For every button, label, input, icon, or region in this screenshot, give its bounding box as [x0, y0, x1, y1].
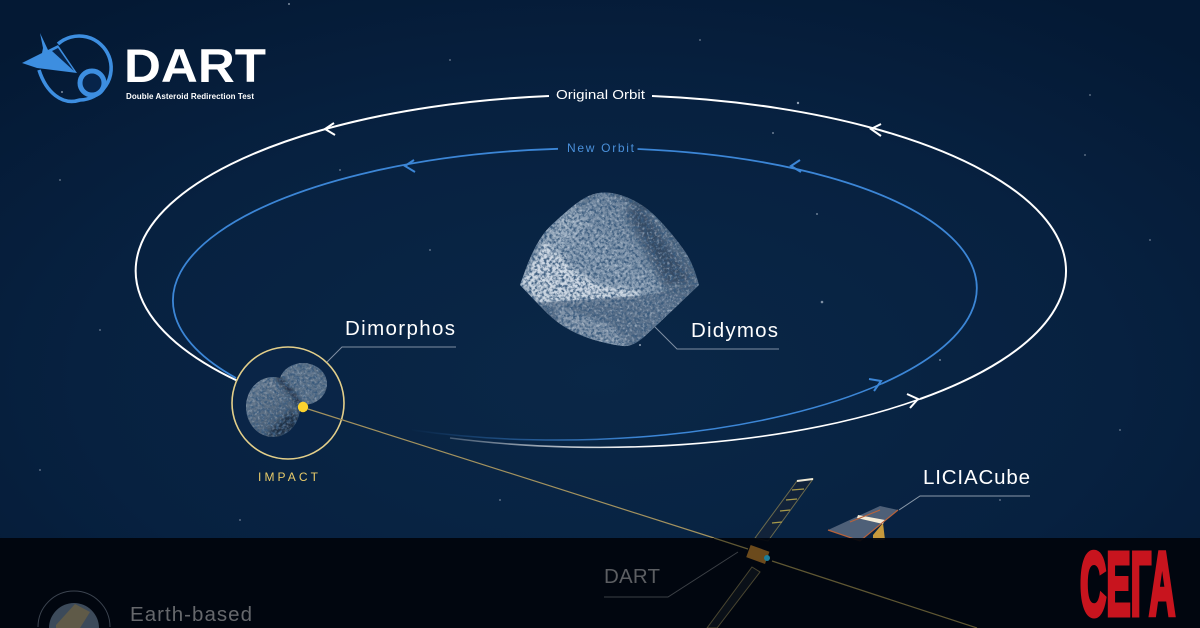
Earth-based observatory icon	[38, 591, 110, 628]
asteroid: Dimorphos	[246, 363, 327, 437]
arrow: new orbit bottom right	[869, 379, 881, 391]
DART logo	[22, 33, 266, 101]
label: Earth-based: Earth-based	[130, 603, 252, 626]
label: Dimorphos with leader: Dimorphos	[345, 317, 455, 340]
impact point	[298, 402, 308, 412]
original orbit (white)	[136, 96, 1066, 447]
trajectory line in band	[714, 538, 977, 628]
asteroid: Didymos	[520, 192, 699, 346]
impact inset circle with Dimorphos	[232, 347, 344, 459]
label: LICIACube with leader: LICIACube	[923, 466, 1030, 489]
label: DART with leader: DART	[604, 565, 660, 588]
label: Didymos with leader	[655, 319, 779, 349]
label: DART with leader	[604, 552, 738, 597]
label: Didymos with leader: Didymos	[691, 319, 778, 342]
DART trajectory line	[308, 409, 714, 538]
LICIACube spacecraft	[828, 506, 898, 541]
arrow: original orbit bottom right	[907, 394, 918, 408]
logo subtitle: Double Asteroid Redirection Test	[126, 92, 254, 101]
logo wordmark: DART	[124, 39, 266, 92]
arrow: new orbit top right	[791, 160, 801, 172]
arrow: original orbit top left	[325, 123, 335, 135]
arrow: original orbit top right	[871, 124, 881, 136]
logo icon	[22, 33, 111, 101]
DART spacecraft body	[707, 545, 770, 628]
label: IMPACT: IMPACT	[258, 470, 319, 484]
DART spacecraft solar panel (upper)	[755, 479, 813, 541]
label: LICIACube with leader	[899, 466, 1030, 510]
bottom dark band	[0, 538, 1200, 628]
new orbit (blue)	[173, 149, 977, 440]
label: Original Orbit: Original Orbit	[556, 88, 646, 102]
dimmed elements over the bottom band	[38, 538, 977, 628]
arrow: new orbit top left	[405, 160, 415, 172]
label: Dimorphos with leader	[327, 317, 456, 362]
label: New Orbit: New Orbit	[567, 141, 635, 155]
